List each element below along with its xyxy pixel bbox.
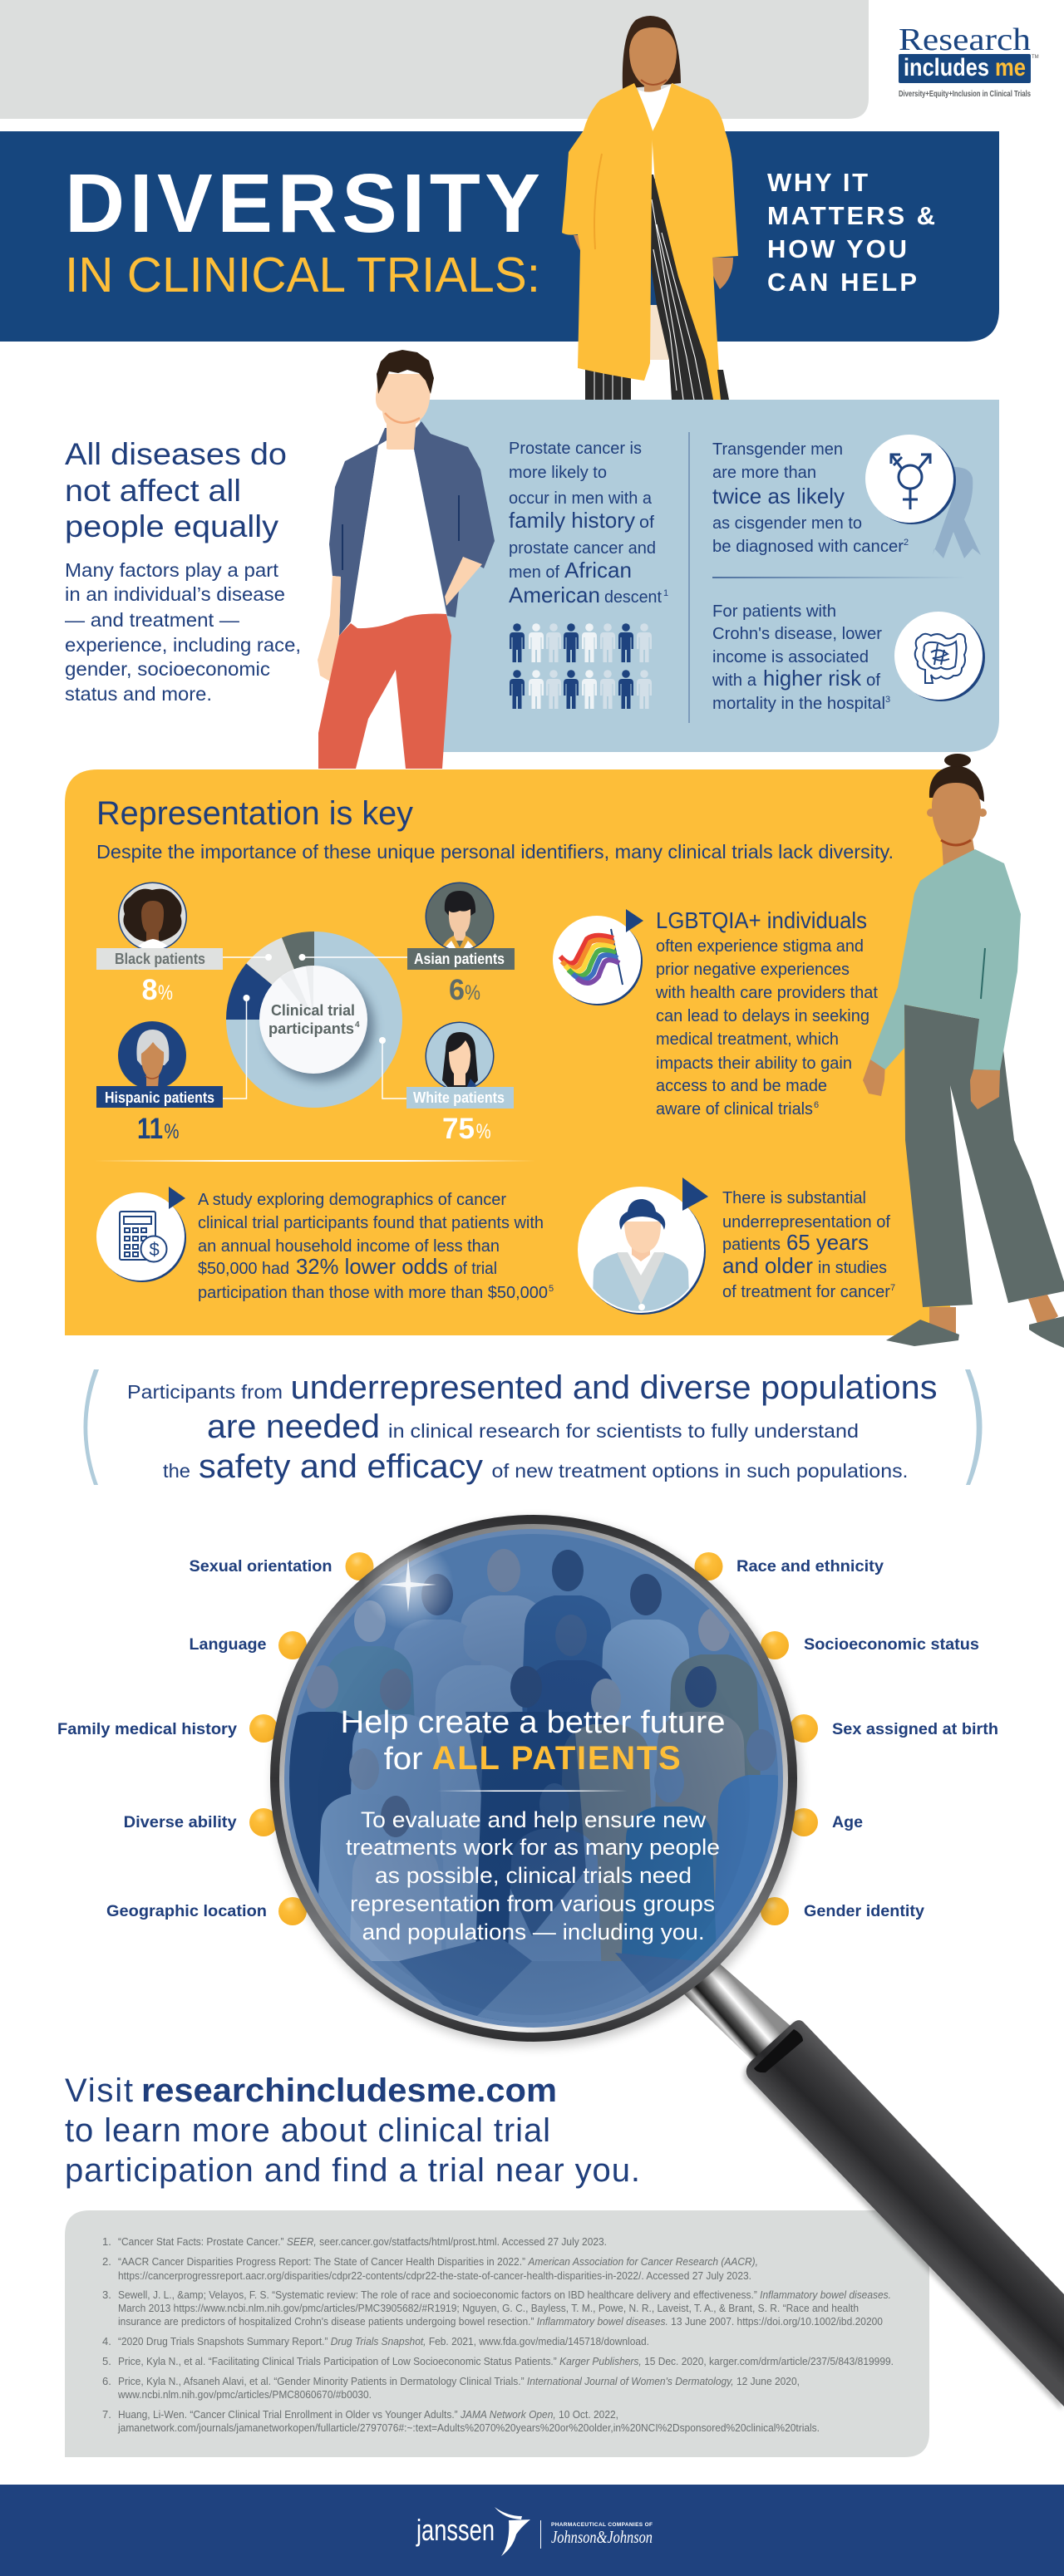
Crohn's disease fact [712, 602, 890, 713]
LGBTQIA+ text: with health care providers that [655, 983, 878, 1002]
LGBTQIA+ text: prior negative experiences [656, 960, 850, 979]
leader lines [223, 954, 407, 1099]
donut chart [226, 932, 402, 1108]
body copy: status and more. [65, 683, 212, 705]
income study text [198, 1190, 554, 1302]
factor labels: Sex assigned at birth [832, 1721, 998, 1738]
label: Asian patients: Asian patients [414, 951, 505, 967]
older patients text: of treatment for cancer [722, 1282, 890, 1301]
lens body text: and populations — including you. [362, 1920, 705, 1944]
title: Diversity: DIVERSITY [65, 157, 540, 250]
LGBTQIA+ text: impacts their ability to gain [656, 1054, 852, 1073]
reference list: 5. [102, 2355, 111, 2367]
income study text: clinical trial participants found that patients with [198, 1213, 544, 1232]
chart center label [268, 1002, 360, 1037]
body copy: — and treatment — [65, 609, 239, 631]
Crohn's disease fact: mortality in the hospital [712, 695, 885, 713]
older patients text: underrepresentation of [722, 1212, 890, 1231]
Crohn's disease fact: of [866, 671, 880, 690]
prostate cancer fact: of [639, 514, 654, 532]
prostate cancer fact [509, 440, 668, 607]
icon: calculator with dollar [96, 1187, 186, 1282]
left bracket [83, 1369, 99, 1485]
factor labels: Sexual orientation [190, 1558, 332, 1576]
reference list: “Cancer Stat Facts: Prostate Cancer.” SEER, seer.cancer.gov/statfacts/html/prost.html. Accessed 27 July 2023. [118, 2235, 607, 2248]
factor labels: Language [190, 1636, 266, 1654]
reference list: 1. [102, 2235, 111, 2248]
logo: Janssen: Johnson&Johnson [551, 2527, 653, 2547]
LGBTQIA+ text: 6 [814, 1100, 819, 1110]
transgender fact: 2 [904, 538, 909, 548]
older patients text: in studies [818, 1258, 887, 1277]
logo: Janssen [416, 2507, 653, 2556]
avatar: Hispanic patients [118, 1021, 186, 1089]
stat: 11 percent: % [165, 1120, 180, 1143]
reference list: https://cancerprogressreport.aacr.org/disparities/cdpr22-contents/cdpr22-the-state-of-cancer-health-disparities-in-2022/. Accessed 27 July 2023. [118, 2269, 751, 2282]
reference list: Price, Kyla N., Afsaneh Alavi, et al. “Gender Minority Patients in Dermatology Clinical Trials.” International Journal of Women's Dermatology, 12 June 2020, [118, 2375, 800, 2387]
prostate cancer fact: family history [509, 508, 635, 533]
Crohn's disease fact: 3 [885, 695, 890, 705]
prostate cancer fact: descent [604, 588, 662, 607]
LGBTQIA+ text: often experience stigma and [656, 937, 864, 956]
factor labels: Socioeconomic status [804, 1636, 979, 1654]
factor labels: Age [832, 1814, 863, 1831]
avatar: older man with hat [578, 1177, 708, 1321]
LGBTQIA+ text: can lead to delays in seeking [656, 1006, 869, 1025]
factor labels: Diverse ability [124, 1814, 237, 1831]
body copy: in an individual’s disease [65, 583, 285, 605]
call to action: researchincludesme.com [141, 2072, 557, 2109]
call to action: to learn more about clinical trial [65, 2112, 550, 2149]
panel: representation is key [65, 769, 950, 1335]
factor dots [249, 1552, 818, 1925]
callout statement: safety and efficacy [199, 1448, 483, 1485]
LGBTQIA+ text: LGBTQIA+ individuals [656, 907, 867, 933]
crowd of people [289, 1534, 778, 2023]
logo: Janssen: PHARMACEUTICAL COMPANIES OF [551, 2522, 653, 2528]
lens heading [341, 1705, 725, 1777]
factor labels: Family medical history [57, 1721, 237, 1738]
chart center label: Clinical trial [271, 1002, 355, 1019]
Crohn's disease fact: Crohn's disease, lower [712, 625, 882, 643]
icon: rainbow flag [553, 909, 643, 1005]
LGBTQIA+ text: medical treatment, which [656, 1030, 839, 1049]
magnifying glass lens [268, 1514, 806, 2052]
side heading: HOW YOU [767, 234, 907, 263]
right bracket [965, 1369, 983, 1485]
body copy: Many factors play a part [65, 559, 279, 581]
factor labels [57, 1558, 998, 1920]
reference list: Price, Kyla N., et al. “Facilitating Clinical Trials Participation of Low Socioeconomic Status Patients.” Karger Publishers, 15 Dec. 2020, karger.com/drm/article/237/5/843/819999. [118, 2355, 894, 2367]
icon: awareness ribbon [933, 467, 981, 558]
transgender fact: are more than [712, 464, 816, 482]
pictogram: people rows [510, 623, 652, 709]
heading: All diseases do [65, 437, 287, 471]
prostate cancer fact: Prostate cancer is [509, 440, 642, 458]
income study text: an annual household income of less than [198, 1236, 500, 1256]
reference list: Huang, Li-Wen. “Cancer Clinical Trial Enrollment in Older vs Younger Adults.” JAMA Network Open, 10 Oct. 2022, [118, 2408, 618, 2421]
body copy [65, 559, 301, 705]
heading: people equally [65, 509, 279, 543]
body copy: experience, including race, [65, 634, 301, 656]
prostate cancer fact: occur in men with a [509, 489, 653, 508]
income study text: 5 [549, 1284, 554, 1294]
avatar: Black patients [118, 882, 187, 952]
icon: calculator with dollar: $ [150, 1239, 160, 1260]
logo: Research includes me: me [995, 54, 1026, 81]
label: Hispanic patients: Hispanic patients [105, 1089, 214, 1106]
reference list: “AACR Cancer Disparities Progress Report: The State of Cancer Health Disparities in 2022.” American Association for Cancer Research (AACR), [118, 2255, 758, 2268]
lens body text [346, 1807, 720, 1944]
reference list: 3. [102, 2288, 111, 2301]
title banner [0, 131, 999, 342]
factor labels: Gender identity [804, 1903, 924, 1920]
LGBTQIA+ text [655, 907, 878, 1118]
prostate cancer fact: men of [509, 563, 559, 582]
callout statement: are needed [207, 1408, 380, 1445]
side heading: WHY IT [767, 168, 868, 197]
factor labels: Geographic location [106, 1903, 267, 1920]
reference list: jamanetwork.com/journals/jamanetworkopen/fullarticle/2797076#:~:text=Adults%2070%20years%20or%20older,in%20NCI%2Dsponsored%20clinical%20trials. [117, 2421, 820, 2434]
header gray tab [0, 0, 869, 119]
chart center label: 4 [355, 1020, 360, 1030]
income study text: $50,000 had [198, 1259, 289, 1278]
older patients text: and older [722, 1253, 813, 1278]
illustration: man with denim jacket [318, 350, 495, 769]
text block: all diseases do not affect all people equally [65, 437, 301, 705]
reference list: March 2013 https://www.ncbi.nlm.nih.gov/pmc/articles/PMC3905682/#R1919; Nguyen, G. C., Bayless, T. M., Powe, N. R., Laveist, T. A., & Brant, S. R. “Race and health [118, 2302, 859, 2314]
LGBTQIA+ text: access to and be made [656, 1076, 827, 1095]
reference list: Sewell, J. L., &amp; Velayos, F. S. “Systematic review: The role of race and socioeconomic factors on IBD healthcare delivery and effectiveness.” Inflammatory bowel diseases. [118, 2288, 891, 2301]
callout statement: of new treatment options in such populations. [492, 1460, 908, 1482]
prostate cancer fact: American [509, 583, 600, 607]
side heading: MATTERS & [767, 201, 935, 230]
callout statement [127, 1369, 938, 1485]
logo: Research includes me [899, 22, 1039, 99]
subtitle: in clinical trials: IN CLINICAL TRIALS: [65, 248, 540, 302]
income study text: 32% lower odds [296, 1254, 448, 1279]
reference list: “2020 Drug Trials Snapshots Summary Report.” Drug Trials Snapshot, Feb. 2021, www.fda.gov/media/145718/download. [118, 2335, 649, 2347]
stat: 6 percent: % [465, 981, 480, 1005]
transgender fact: Transgender men [712, 440, 843, 459]
transgender fact: as cisgender men to [712, 514, 862, 533]
stat: 6 percent: 6 [449, 974, 465, 1006]
stat: 8 percent: % [158, 981, 173, 1005]
older patients text [722, 1188, 895, 1301]
income study text: participation than those with more than $50,000 [198, 1283, 548, 1302]
intro text: Despite the importance of these unique personal identifiers, many clinical trials lack diversity. [96, 841, 894, 863]
stat: 6 percent [449, 974, 480, 1006]
stat: 75 percent: 75 [442, 1113, 475, 1145]
side heading: CAN HELP [767, 268, 917, 297]
lens heading: ALL PATIENTS [432, 1740, 681, 1777]
icon: intestines [894, 612, 985, 701]
label: Black patients: Black patients [115, 951, 205, 967]
transgender fact: twice as likely [712, 484, 845, 509]
stat: 11 percent: 11 [137, 1113, 163, 1145]
heading [65, 437, 287, 543]
prostate cancer fact: prostate cancer and [509, 539, 656, 558]
callout statement: in clinical research for scientists to fully understand [388, 1420, 859, 1442]
reference list: 6. [102, 2375, 111, 2387]
call to action [65, 2072, 640, 2189]
panel: disease facts background [420, 400, 999, 752]
reference list [102, 2235, 894, 2434]
Crohn's disease fact: income is associated [712, 648, 869, 666]
icon: transgender symbol [865, 435, 956, 524]
heading: representation is key: Representation is key [96, 795, 413, 832]
stat: 75 percent: % [476, 1120, 491, 1143]
reference list: 7. [102, 2408, 111, 2421]
logo: Janssen: janssen [416, 2513, 495, 2547]
Crohn's disease fact: higher risk [763, 666, 862, 691]
logo: Research includes me: Research [899, 22, 1031, 57]
Crohn's disease fact: For patients with [712, 602, 836, 621]
heading: not affect all [65, 474, 241, 508]
reference list: 2. [102, 2255, 111, 2268]
callout statement: the [163, 1460, 190, 1482]
older patients text: There is substantial [722, 1188, 866, 1207]
label: White patients: White patients [413, 1089, 505, 1106]
Crohn's disease fact: with a [712, 671, 757, 690]
older patients text: 7 [890, 1283, 895, 1293]
income study text: of trial [454, 1259, 497, 1278]
reference panel [65, 2210, 929, 2457]
logo: Research includes me: includes [904, 54, 989, 81]
transgender fact [712, 440, 909, 556]
reference list: www.ncbi.nlm.nih.gov/pmc/articles/PMC8060670/#b0030. [117, 2388, 372, 2401]
logo: Research includes me: TM [1032, 55, 1039, 60]
lens heading: for [384, 1742, 423, 1777]
older patients text: 65 years [786, 1230, 869, 1255]
call to action: Visit [65, 2072, 133, 2109]
LGBTQIA+ text: aware of clinical trials [656, 1099, 813, 1118]
body copy: gender, socioeconomic [65, 658, 270, 680]
illustration: person in teal sweater [863, 754, 1064, 1348]
avatar: White patients [426, 1022, 494, 1090]
prostate cancer fact: African [564, 558, 632, 583]
reference list: 4. [102, 2335, 111, 2347]
lens heading: Help create a better future [341, 1705, 725, 1740]
side heading [767, 168, 935, 297]
illustration: woman in yellow coat [562, 16, 738, 400]
callout statement: underrepresented and diverse populations [291, 1369, 938, 1406]
footer bar [0, 2485, 1064, 2576]
reference list: insurance are predictors of hospitalized Crohn's disease patients undergoing bowel resection.” Inflammatory bowel diseases. 13 June 2007. https://doi.org/10.1002/ibd.20200 [118, 2315, 883, 2328]
older patients text: patients [722, 1235, 781, 1254]
call to action: participation and find a trial near you. [65, 2152, 640, 2189]
callout statement: Participants from [127, 1381, 283, 1403]
income study text: A study exploring demographics of cancer [198, 1190, 506, 1209]
prostate cancer fact: 1 [663, 588, 668, 598]
magnifying glass handle [681, 1959, 1064, 2410]
chart center label: participants [268, 1020, 354, 1037]
stat: 8 percent [141, 974, 173, 1006]
lens flare [362, 1539, 454, 1630]
lens body text: representation from various groups [350, 1891, 715, 1916]
lens body text: To evaluate and help ensure new [361, 1807, 707, 1832]
lens body text: treatments work for as many people [346, 1835, 720, 1860]
avatar: Asian patients [426, 882, 494, 952]
transgender fact: be diagnosed with cancer [712, 538, 904, 556]
label: Hispanic patients [96, 1086, 223, 1108]
lens body text: as possible, clinical trials need [375, 1863, 692, 1888]
stat: 8 percent: 8 [141, 974, 158, 1006]
factor labels: Race and ethnicity [736, 1558, 884, 1576]
label: Black patients [96, 948, 223, 970]
prostate cancer fact: more likely to [509, 464, 607, 482]
stat: 75 percent [442, 1113, 491, 1145]
